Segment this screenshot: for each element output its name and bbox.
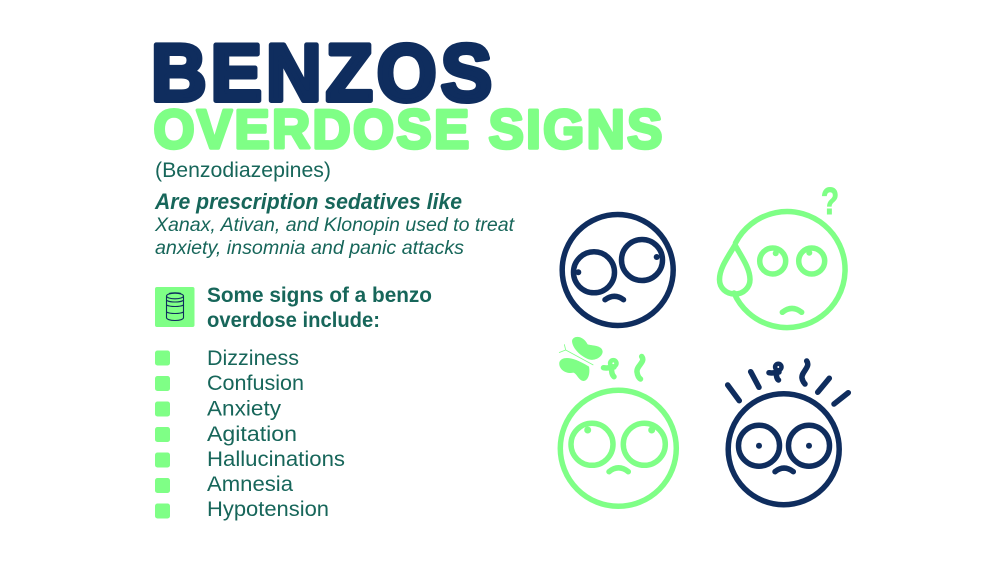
title: BENZOS: BENZOS xyxy=(151,27,492,118)
heading: signs of overdose xyxy=(207,284,432,332)
item: Amnesia xyxy=(155,473,293,496)
description text block: anxiety, insomnia and panic attacks xyxy=(155,238,465,259)
description text block: Xanax, Ativan, and Klonopin used to treat xyxy=(154,215,515,236)
item: Dizziness xyxy=(155,347,299,370)
item: Dizziness: Dizziness xyxy=(207,347,299,370)
description text block xyxy=(154,189,515,259)
item: Confusion: Confusion xyxy=(207,372,304,395)
icon: navy face with dizzy lines xyxy=(728,361,848,505)
item: Hypotension: Hypotension xyxy=(207,498,329,521)
subtitle: OVERDOSE SIGNS: OVERDOSE SIGNS xyxy=(154,99,662,160)
list of signs xyxy=(155,347,345,521)
icon: green face with sweat drop and question mark: ? xyxy=(821,181,839,223)
heading: signs of overdose: overdose include: xyxy=(207,309,380,332)
item: Agitation xyxy=(155,423,297,446)
item: Hypotension xyxy=(155,498,329,521)
item: Confusion xyxy=(155,372,304,395)
item: Hallucinations: Hallucinations xyxy=(207,448,345,471)
text: Benzodiazepines: (Benzodiazepines) xyxy=(155,159,331,182)
item: Anxiety: Anxiety xyxy=(207,398,282,420)
item: Anxiety xyxy=(155,398,282,420)
item: Amnesia: Amnesia xyxy=(207,473,293,496)
icon: green face with sweat drop and question mark xyxy=(720,181,845,328)
heading: signs of overdose: Some signs of a benzo xyxy=(207,284,432,307)
icon: green face with butterfly hallucination xyxy=(559,337,676,506)
item: Agitation: Agitation xyxy=(207,423,297,446)
description text block: Are prescription sedatives like xyxy=(154,189,462,214)
icon: navy face with uneven eyes xyxy=(562,214,673,326)
icon: pill bottle xyxy=(155,287,194,327)
item: Hallucinations xyxy=(155,448,345,471)
icon: butterfly xyxy=(559,337,603,381)
